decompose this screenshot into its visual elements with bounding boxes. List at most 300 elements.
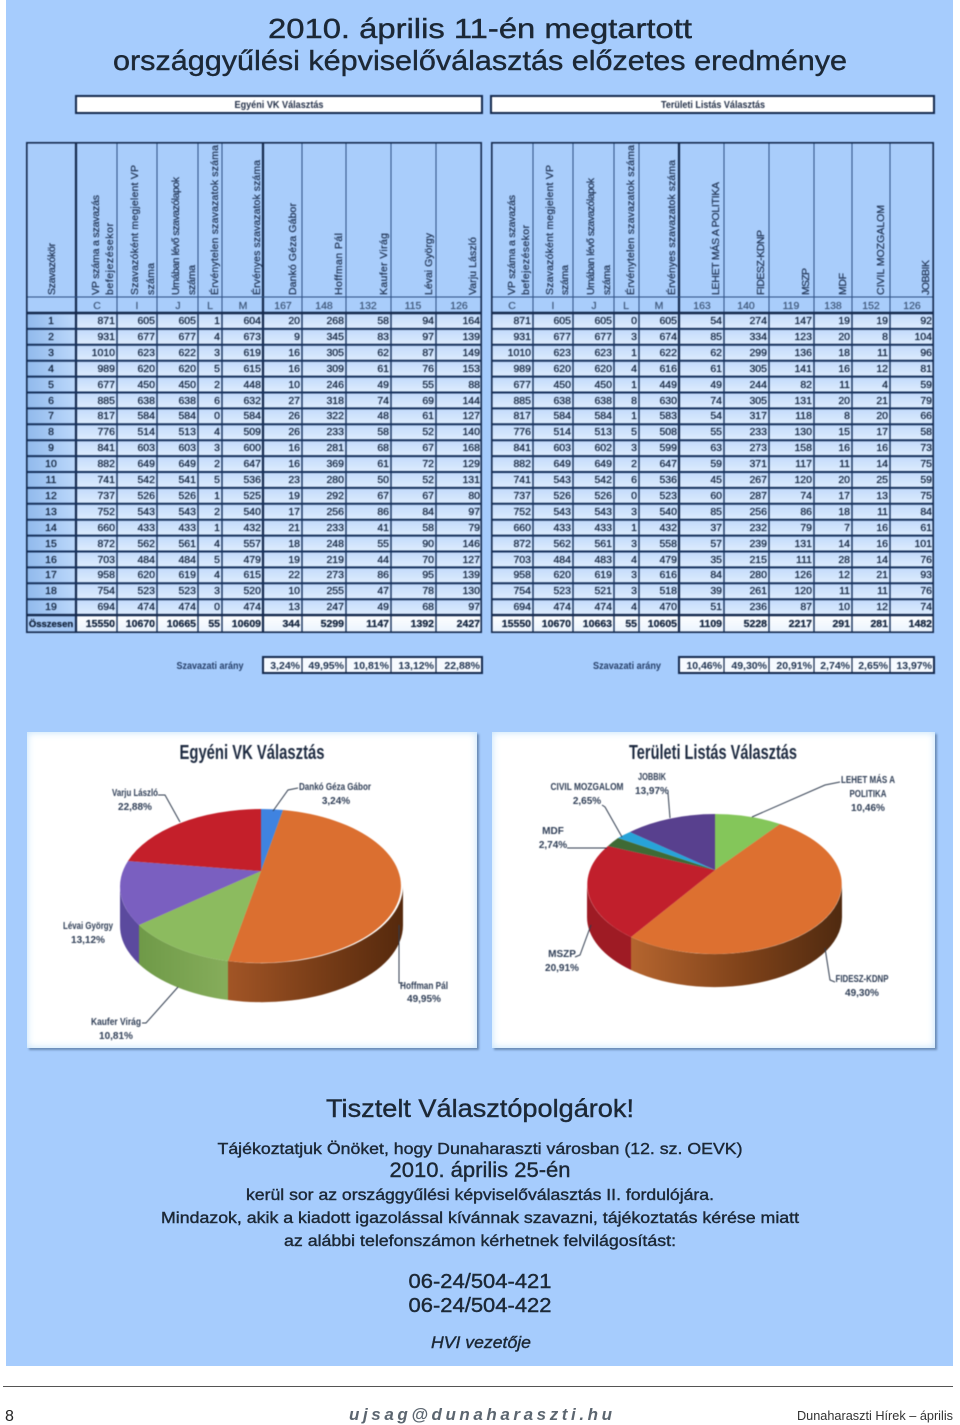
rotated column headings: száma: [145, 263, 157, 295]
table rows: precincts 1-19 and total: 674: [659, 331, 677, 343]
table: Területi Listás results: [491, 142, 934, 633]
table rows: precincts 1-19 and total: 526: [553, 490, 571, 502]
table rows: precincts 1-19 and total: 51: [710, 601, 722, 613]
table rows: precincts 1-19 and total: [28, 314, 481, 632]
table rows: precincts 1-19 and total: 479: [243, 554, 261, 566]
table rows: precincts 1-19 and total: 12: [45, 490, 57, 502]
table rows: precincts 1-19 and total: 23: [288, 474, 300, 486]
table rows: precincts 1-19 and total: 59: [920, 379, 932, 391]
table rows: precincts 1-19 and total: 10: [838, 601, 850, 613]
title bar: Területi Listás Választás: [489, 94, 936, 115]
table rows: precincts 1-19 and total: 1482: [909, 618, 932, 630]
table rows: precincts 1-19 and total: 15550: [502, 618, 531, 630]
table rows: precincts 1-19 and total: 76: [920, 585, 932, 597]
table rows: precincts 1-19 and total: 67: [422, 442, 434, 454]
table rows: precincts 1-19 and total: 433: [594, 522, 612, 534]
vote share row: Területi Listás: 49,30%: [731, 660, 768, 672]
table rows: precincts 1-19 and total: 509: [243, 426, 261, 438]
table: Egyéni VK results: [26, 142, 482, 633]
notice heading: Tisztelt Választópolgárok!: [326, 1095, 634, 1123]
table rows: precincts 1-19 and total: 287: [749, 490, 767, 502]
table rows: precincts 1-19 and total: 542: [137, 474, 155, 486]
table rows: precincts 1-19 and total: 871: [97, 315, 115, 327]
table rows: precincts 1-19 and total: 66: [920, 410, 932, 422]
table rows: precincts 1-19 and total: 62: [377, 347, 389, 359]
table rows: precincts 1-19 and total: 76: [422, 363, 434, 375]
table rows: precincts 1-19 and total: 3: [631, 585, 637, 597]
rotated column headings: száma: [559, 265, 571, 295]
table rows: precincts 1-19 and total: 1: [631, 347, 637, 359]
table rows: precincts 1-19 and total: 703: [513, 554, 531, 566]
table rows: precincts 1-19 and total: 622: [659, 347, 677, 359]
table rows: precincts 1-19 and total: 5: [214, 363, 220, 375]
table rows: precincts 1-19 and total: 603: [553, 442, 571, 454]
table rows: precincts 1-19 and total: 233: [326, 426, 344, 438]
table rows: precincts 1-19 and total: 85: [710, 331, 722, 343]
table rows: precincts 1-19 and total: 63: [710, 442, 722, 454]
chart title: Területi Listás Választás: [629, 742, 797, 764]
column letter row: 163: [693, 300, 711, 312]
label: LEHET MÁS A POLITIKA: LEHET MÁS A: [841, 773, 895, 786]
table rows: precincts 1-19 and total: 26: [288, 426, 300, 438]
table rows: precincts 1-19 and total: 562: [553, 538, 571, 550]
label: MSZP: MSZP: [548, 949, 576, 960]
label: MSZP: [545, 925, 591, 974]
table rows: precincts 1-19 and total: 1: [214, 315, 220, 327]
table rows: precincts 1-19 and total: 526: [594, 490, 612, 502]
table rows: precincts 1-19 and total: 619: [178, 569, 196, 581]
table rows: precincts 1-19 and total: 61: [422, 410, 434, 422]
table rows: precincts 1-19 and total: 94: [422, 315, 434, 327]
table rows: precincts 1-19 and total: 7: [48, 410, 54, 422]
table rows: precincts 1-19 and total: 13: [45, 506, 57, 518]
table rows: precincts 1-19 and total: 817: [97, 410, 115, 422]
chart title: Egyéni VK Választás: [180, 742, 324, 764]
table rows: precincts 1-19 and total: 931: [513, 331, 531, 343]
table rows: precincts 1-19 and total: 15: [838, 426, 850, 438]
table rows: precincts 1-19 and total: 4: [214, 331, 220, 343]
table rows: precincts 1-19 and total: 752: [513, 506, 531, 518]
table rows: precincts 1-19 and total: 677: [178, 331, 196, 343]
rotated column headings: Érvényes szavazatok száma: [250, 160, 263, 295]
table rows: precincts 1-19 and total: 623: [594, 347, 612, 359]
table rows: precincts 1-19 and total: 615: [243, 569, 261, 581]
table rows: precincts 1-19 and total: 10609: [232, 618, 261, 630]
table rows: precincts 1-19 and total: 59: [920, 474, 932, 486]
vote share row: Egyéni VK: 10,81%: [353, 660, 390, 672]
table rows: precincts 1-19 and total: 334: [749, 331, 767, 343]
table rows: precincts 1-19 and total: 649: [137, 458, 155, 470]
label: Lévai György: [63, 921, 113, 946]
rotated column headings: Varju László: [467, 237, 479, 295]
table rows: precincts 1-19 and total: 557: [243, 538, 261, 550]
table rows: precincts 1-19 and total: 19: [288, 554, 300, 566]
table rows: precincts 1-19 and total: 68: [422, 601, 434, 613]
table rows: precincts 1-19 and total: 61: [377, 458, 389, 470]
table rows: precincts 1-19 and total: 74: [800, 490, 812, 502]
table rows: precincts 1-19 and total: 660: [97, 522, 115, 534]
table rows: precincts 1-19 and total: 523: [553, 585, 571, 597]
label: FIDESZ-KDNP: 49,30%: [845, 988, 879, 999]
table rows: precincts 1-19 and total: 817: [513, 410, 531, 422]
table rows: precincts 1-19 and total: 622: [178, 347, 196, 359]
table rows: precincts 1-19 and total: 129: [462, 458, 480, 470]
table rows: precincts 1-19 and total: 584: [137, 410, 155, 422]
table rows: precincts 1-19 and total: 3: [214, 347, 220, 359]
column letter row: M: [655, 300, 663, 312]
table rows: precincts 1-19 and total: 149: [462, 347, 480, 359]
table rows: precincts 1-19 and total: 239: [749, 538, 767, 550]
table header and grid lines: [25, 141, 483, 634]
table rows: precincts 1-19 and total: 101: [914, 538, 932, 550]
table rows: precincts 1-19 and total: 26: [288, 410, 300, 422]
table rows: precincts 1-19 and total: 10: [45, 458, 57, 470]
table rows: precincts 1-19 and total: 885: [513, 394, 531, 406]
table rows: precincts 1-19 and total: 448: [243, 379, 261, 391]
table rows: precincts 1-19 and total: 16: [876, 522, 888, 534]
vote share row: Egyéni VK: [176, 655, 484, 675]
notice text block: [161, 1095, 800, 1352]
table rows: precincts 1-19 and total: 0: [631, 490, 637, 502]
table rows: precincts 1-19 and total: 292: [326, 490, 344, 502]
notice paragraph: kerül sor az országgyűlési képviselőválasztás II. fordulójára.: [246, 1187, 714, 1204]
table rows: precincts 1-19 and total: 882: [513, 458, 531, 470]
table rows: precincts 1-19 and total: 17: [838, 490, 850, 502]
table rows: precincts 1-19 and total: 68: [377, 442, 389, 454]
rotated column headings: Kaufer Virág: [378, 233, 390, 295]
table rows: precincts 1-19 and total: 127: [462, 554, 480, 566]
table rows: precincts 1-19 and total: 97: [468, 506, 480, 518]
table rows: precincts 1-19 and total: 299: [749, 347, 767, 359]
table rows: precincts 1-19 and total: 60: [710, 490, 722, 502]
table rows: precincts 1-19 and total: 872: [97, 538, 115, 550]
table rows: precincts 1-19 and total: 16: [838, 442, 850, 454]
label: Dankó Géza Gábor: [273, 782, 371, 811]
table rows: precincts 1-19 and total: 0: [214, 410, 220, 422]
table rows: precincts 1-19 and total: 13: [288, 601, 300, 613]
label: Lévai György: 13,12%: [71, 935, 105, 946]
table rows: precincts 1-19 and total: 5: [48, 379, 54, 391]
table rows: precincts 1-19 and total: 15550: [86, 618, 115, 630]
rotated column headings: Urnában lévő szavazólapok: [170, 176, 182, 295]
table rows: precincts 1-19 and total: 449: [659, 379, 677, 391]
table rows: precincts 1-19 and total: 638: [594, 394, 612, 406]
slice: JOBBIK: [630, 814, 715, 870]
table rows: precincts 1-19 and total: 25: [876, 474, 888, 486]
vote share row: Egyéni VK: 49,95%: [308, 660, 345, 672]
table rows: precincts 1-19 and total: 48: [377, 410, 389, 422]
table rows: precincts 1-19 and total: 604: [243, 315, 261, 327]
table rows: precincts 1-19 and total: 620: [137, 363, 155, 375]
table rows: precincts 1-19 and total: 542: [594, 474, 612, 486]
table rows: precincts 1-19 and total: 433: [137, 522, 155, 534]
table rows: precincts 1-19 and total: 2: [214, 379, 220, 391]
rotated column headings: száma: [601, 265, 613, 295]
table rows: precincts 1-19 and total: 620: [594, 363, 612, 375]
table rows: precincts 1-19 and total: 484: [137, 554, 155, 566]
table rows: precincts 1-19 and total: 78: [422, 585, 434, 597]
table rows: precincts 1-19 and total: 17: [876, 426, 888, 438]
table rows: precincts 1-19 and total: 158: [794, 442, 812, 454]
rotated column headings: befejezésekor: [104, 222, 116, 295]
table rows: precincts 1-19 and total: 737: [513, 490, 531, 502]
table rows: precincts 1-19 and total: 605: [178, 315, 196, 327]
table rows: precincts 1-19 and total: 8: [48, 426, 54, 438]
title bar: Egyéni VK Választás: [74, 94, 484, 115]
table rows: precincts 1-19 and total: 256: [749, 506, 767, 518]
rotated column headings: VP száma a szavazás: [90, 195, 102, 295]
column letter row: C: [93, 300, 101, 312]
table rows: precincts 1-19 and total: 16: [288, 363, 300, 375]
table rows: precincts 1-19 and total: 584: [594, 410, 612, 422]
table rows: precincts 1-19 and total: 86: [377, 506, 389, 518]
table rows: precincts 1-19 and total: 1010: [508, 347, 531, 359]
table rows: precincts 1-19 and total: 536: [243, 474, 261, 486]
footer: [3, 1386, 953, 1425]
table rows: precincts 1-19 and total: 526: [137, 490, 155, 502]
table rows: precincts 1-19 and total: 20: [838, 331, 850, 343]
table rows: precincts 1-19 and total: 88: [468, 379, 480, 391]
table rows: precincts 1-19 and total: 479: [659, 554, 677, 566]
column letter row: [508, 300, 921, 312]
label: Dankó Géza Gábor: 3,24%: [322, 796, 350, 807]
table rows: precincts 1-19 and total: 754: [97, 585, 115, 597]
table rows: precincts 1-19 and total: 61: [920, 522, 932, 534]
table rows: precincts 1-19 and total: 3: [214, 585, 220, 597]
table rows: precincts 1-19 and total: 84: [920, 506, 932, 518]
slice: Lévai György: [120, 861, 261, 925]
table rows: precincts 1-19 and total: 140: [462, 426, 480, 438]
table rows: precincts 1-19 and total: 649: [594, 458, 612, 470]
table rows: precincts 1-19 and total: 4: [882, 379, 888, 391]
main title: 2010. április 11-én megtartott: [268, 13, 692, 44]
table rows: precincts 1-19 and total: 55: [422, 379, 434, 391]
table rows: precincts 1-19 and total: 90: [422, 538, 434, 550]
table rows: precincts 1-19 and total: 273: [326, 569, 344, 581]
label: CIVIL MOZGALOM: 2,65%: [573, 796, 601, 807]
vote share row: Egyéni VK: 22,88%: [444, 660, 481, 672]
table rows: precincts 1-19 and total: 58: [920, 426, 932, 438]
table rows: precincts 1-19 and total: 989: [513, 363, 531, 375]
table rows: precincts 1-19 and total: 57: [710, 538, 722, 550]
table rows: precincts 1-19 and total: 5: [214, 474, 220, 486]
table rows: precincts 1-19 and total: 474: [594, 601, 612, 613]
table rows: precincts 1-19 and total: 523: [659, 490, 677, 502]
rotated column headings: Dankó Géza Gábor: [287, 202, 299, 295]
table rows: precincts 1-19 and total: 10605: [648, 618, 677, 630]
table rows: precincts 1-19 and total: 219: [326, 554, 344, 566]
rotated column headings: JOBBIK: [920, 260, 932, 295]
table rows: precincts 1-19 and total: 58: [422, 522, 434, 534]
table rows: precincts 1-19 and total: 369: [326, 458, 344, 470]
table rows: precincts 1-19 and total: 120: [794, 585, 812, 597]
signature: HVI vezetője: [431, 1333, 531, 1352]
label: MDF: 2,74%: [539, 840, 567, 851]
table rows: precincts 1-19 and total: 82: [800, 379, 812, 391]
page number: 8: [5, 1408, 14, 1425]
table rows: precincts 1-19 and total: 97: [422, 331, 434, 343]
table rows: precincts 1-19 and total: 2427: [457, 618, 480, 630]
table rows: precincts 1-19 and total: 322: [326, 410, 344, 422]
table rows: precincts 1-19 and total: 741: [97, 474, 115, 486]
table rows: precincts 1-19 and total: 16: [45, 554, 57, 566]
table rows: precincts 1-19 and total: 474: [243, 601, 261, 613]
table rows: precincts 1-19 and total: 16: [876, 538, 888, 550]
rotated column headings: Szavazóként megjelent VP: [129, 165, 141, 295]
table rows: precincts 1-19 and total: 605: [659, 315, 677, 327]
vote share row: Területi Listás: 20,91%: [776, 660, 813, 672]
table rows: precincts 1-19 and total: 882: [97, 458, 115, 470]
table rows: precincts 1-19 and total: 1: [48, 315, 54, 327]
table rows: precincts 1-19 and total: 14: [876, 458, 888, 470]
rotated column headings: VP száma a szavazás: [506, 195, 518, 295]
main title: [113, 13, 847, 76]
table rows: precincts 1-19 and total: 620: [178, 363, 196, 375]
table rows: precincts 1-19 and total: 470: [659, 601, 677, 613]
table rows: precincts 1-19 and total: 841: [97, 442, 115, 454]
table rows: precincts 1-19 and total: 16: [876, 442, 888, 454]
table rows: precincts 1-19 and total: 136: [794, 347, 812, 359]
table rows: precincts 1-19 and total: 244: [749, 379, 767, 391]
table rows: precincts 1-19 and total: 1: [631, 410, 637, 422]
table rows: precincts 1-19 and total: 371: [749, 458, 767, 470]
notice paragraph: az alábbi telefonszámon kérhetnek felvilágosítást:: [284, 1233, 676, 1250]
table rows: precincts 1-19 and total: 247: [326, 601, 344, 613]
table rows: precincts 1-19 and total: 521: [594, 585, 612, 597]
table header and grid lines: [490, 141, 935, 634]
slice: FIDESZ-KDNP: [631, 824, 842, 954]
table rows: precincts 1-19 and total: 3: [631, 538, 637, 550]
table rows: precincts 1-19 and total: 931: [97, 331, 115, 343]
table rows: precincts 1-19 and total: 79: [468, 522, 480, 534]
table rows: precincts 1-19 and total: 450: [178, 379, 196, 391]
title bar: Egyéni VK Választás: Egyéni VK Választás: [234, 99, 324, 111]
table rows: precincts 1-19 and total: 561: [178, 538, 196, 550]
slice: Kaufer Virág: [139, 871, 261, 961]
table rows: precincts 1-19 and total: 21: [876, 569, 888, 581]
table rows: precincts 1-19 and total: 74: [920, 601, 932, 613]
table rows: precincts 1-19 and total: 344: [282, 618, 300, 630]
table rows: precincts 1-19 and total: 752: [97, 506, 115, 518]
table rows: precincts 1-19 and total: 96: [920, 347, 932, 359]
table rows: precincts 1-19 and total: 561: [594, 538, 612, 550]
table rows: precincts 1-19 and total: 280: [326, 474, 344, 486]
table rows: precincts 1-19 and total: 6: [48, 394, 54, 406]
table rows: precincts 1-19 and total: 620: [553, 363, 571, 375]
table rows: precincts 1-19 and total: 605: [594, 315, 612, 327]
table rows: precincts 1-19 and total: 215: [749, 554, 767, 566]
table rows: precincts 1-19 and total: 168: [462, 442, 480, 454]
table rows: precincts 1-19 and total: 16: [288, 458, 300, 470]
column letter row: 152: [862, 300, 880, 312]
table rows: precincts 1-19 and total: 73: [920, 442, 932, 454]
table rows: precincts 1-19 and total: 268: [326, 315, 344, 327]
label: FIDESZ-KDNP: [825, 948, 889, 999]
table rows: precincts 1-19 and total: 62: [710, 347, 722, 359]
table rows: precincts 1-19 and total: 1392: [411, 618, 434, 630]
table rows: precincts 1-19 and total: 58: [377, 426, 389, 438]
table rows: precincts 1-19 and total: 520: [243, 585, 261, 597]
table rows: precincts 1-19 and total: 49: [377, 601, 389, 613]
table rows: precincts 1-19 and total: 37: [710, 522, 722, 534]
table rows: precincts 1-19 and total: 1147: [366, 618, 389, 630]
table rows: precincts 1-19 and total: 10665: [167, 618, 196, 630]
table rows: precincts 1-19 and total: 10663: [583, 618, 612, 630]
table rows: precincts 1-19 and total: 246: [326, 379, 344, 391]
table rows: precincts 1-19 and total: 5: [631, 426, 637, 438]
table rows: precincts 1-19 and total: 558: [659, 538, 677, 550]
table rows: precincts 1-19 and total: 11: [839, 379, 850, 391]
rotated column headings: CIVIL MOZGALOM: [875, 205, 887, 295]
table rows: precincts 1-19 and total: 305: [749, 394, 767, 406]
table rows: precincts 1-19 and total: [492, 314, 933, 632]
table rows: precincts 1-19 and total: 450: [594, 379, 612, 391]
table rows: precincts 1-19 and total: 255: [326, 585, 344, 597]
table rows: precincts 1-19 and total: 49: [710, 379, 722, 391]
table rows: precincts 1-19 and total: 14: [838, 538, 850, 550]
table rows: precincts 1-19 and total: 83: [377, 331, 389, 343]
table rows: precincts 1-19 and total: 4: [214, 538, 220, 550]
label: LEHET MÁS A POLITIKA: [752, 773, 895, 817]
table rows: precincts 1-19 and total: 74: [377, 394, 389, 406]
label: Varju László: 22,88%: [118, 802, 152, 813]
table rows: precincts 1-19 and total: 11: [877, 506, 888, 518]
table rows: precincts 1-19 and total: 599: [659, 442, 677, 454]
table rows: precincts 1-19 and total: 872: [513, 538, 531, 550]
table rows: precincts 1-19 and total: 76: [920, 554, 932, 566]
table rows: precincts 1-19 and total: 623: [553, 347, 571, 359]
rotated column headings: MDF: [837, 273, 849, 295]
table rows: precincts 1-19 and total: 584: [243, 410, 261, 422]
rotated column headings: befejezésekor: [520, 224, 532, 295]
table rows: precincts 1-19 and total: 647: [243, 458, 261, 470]
publication name: Dunaharaszti Hírek – április: [797, 1409, 953, 1423]
table rows: precincts 1-19 and total: 638: [178, 394, 196, 406]
table rows: precincts 1-19 and total: 583: [659, 410, 677, 422]
table rows: precincts 1-19 and total: 79: [920, 394, 932, 406]
table rows: precincts 1-19 and total: 616: [659, 569, 677, 581]
table rows: precincts 1-19 and total: 153: [462, 363, 480, 375]
column letter row: 148: [315, 300, 333, 312]
table rows: precincts 1-19 and total: 518: [659, 585, 677, 597]
table rows: precincts 1-19 and total: 605: [137, 315, 155, 327]
table rows: precincts 1-19 and total: 15: [45, 538, 57, 550]
rotated column headings: [506, 145, 932, 295]
table rows: precincts 1-19 and total: 19: [838, 315, 850, 327]
table rows: precincts 1-19 and total: 677: [553, 331, 571, 343]
table rows: precincts 1-19 and total: 8: [631, 394, 637, 406]
table rows: precincts 1-19 and total: 1: [631, 522, 637, 534]
rotated column headings: Érvénytelen szavazatok száma: [208, 145, 221, 295]
table rows: precincts 1-19 and total: 141: [794, 363, 812, 375]
notice paragraph: Mindazok, akik a kiadott igazolással kívánnak szavazni, tájékoztatás kérése miatt: [161, 1210, 800, 1227]
rotated column headings: Érvényes szavazatok száma: [665, 160, 678, 295]
table rows: precincts 1-19 and total: 603: [137, 442, 155, 454]
table rows: precincts 1-19 and total: 20: [876, 410, 888, 422]
table rows: precincts 1-19 and total: 13: [876, 490, 888, 502]
column letter row: [93, 300, 468, 312]
table rows: precincts 1-19 and total: 27: [288, 394, 300, 406]
table rows: precincts 1-19 and total: 4: [214, 569, 220, 581]
table rows: precincts 1-19 and total: 104: [914, 331, 932, 343]
table rows: precincts 1-19 and total: 305: [326, 347, 344, 359]
column letter row: 167: [274, 300, 292, 312]
table rows: precincts 1-19 and total: 21: [876, 394, 888, 406]
table rows: precincts 1-19 and total: 17: [45, 569, 57, 581]
table rows: precincts 1-19 and total: 703: [97, 554, 115, 566]
table rows: precincts 1-19 and total: 147: [794, 315, 812, 327]
table rows: precincts 1-19 and total: 127: [462, 410, 480, 422]
